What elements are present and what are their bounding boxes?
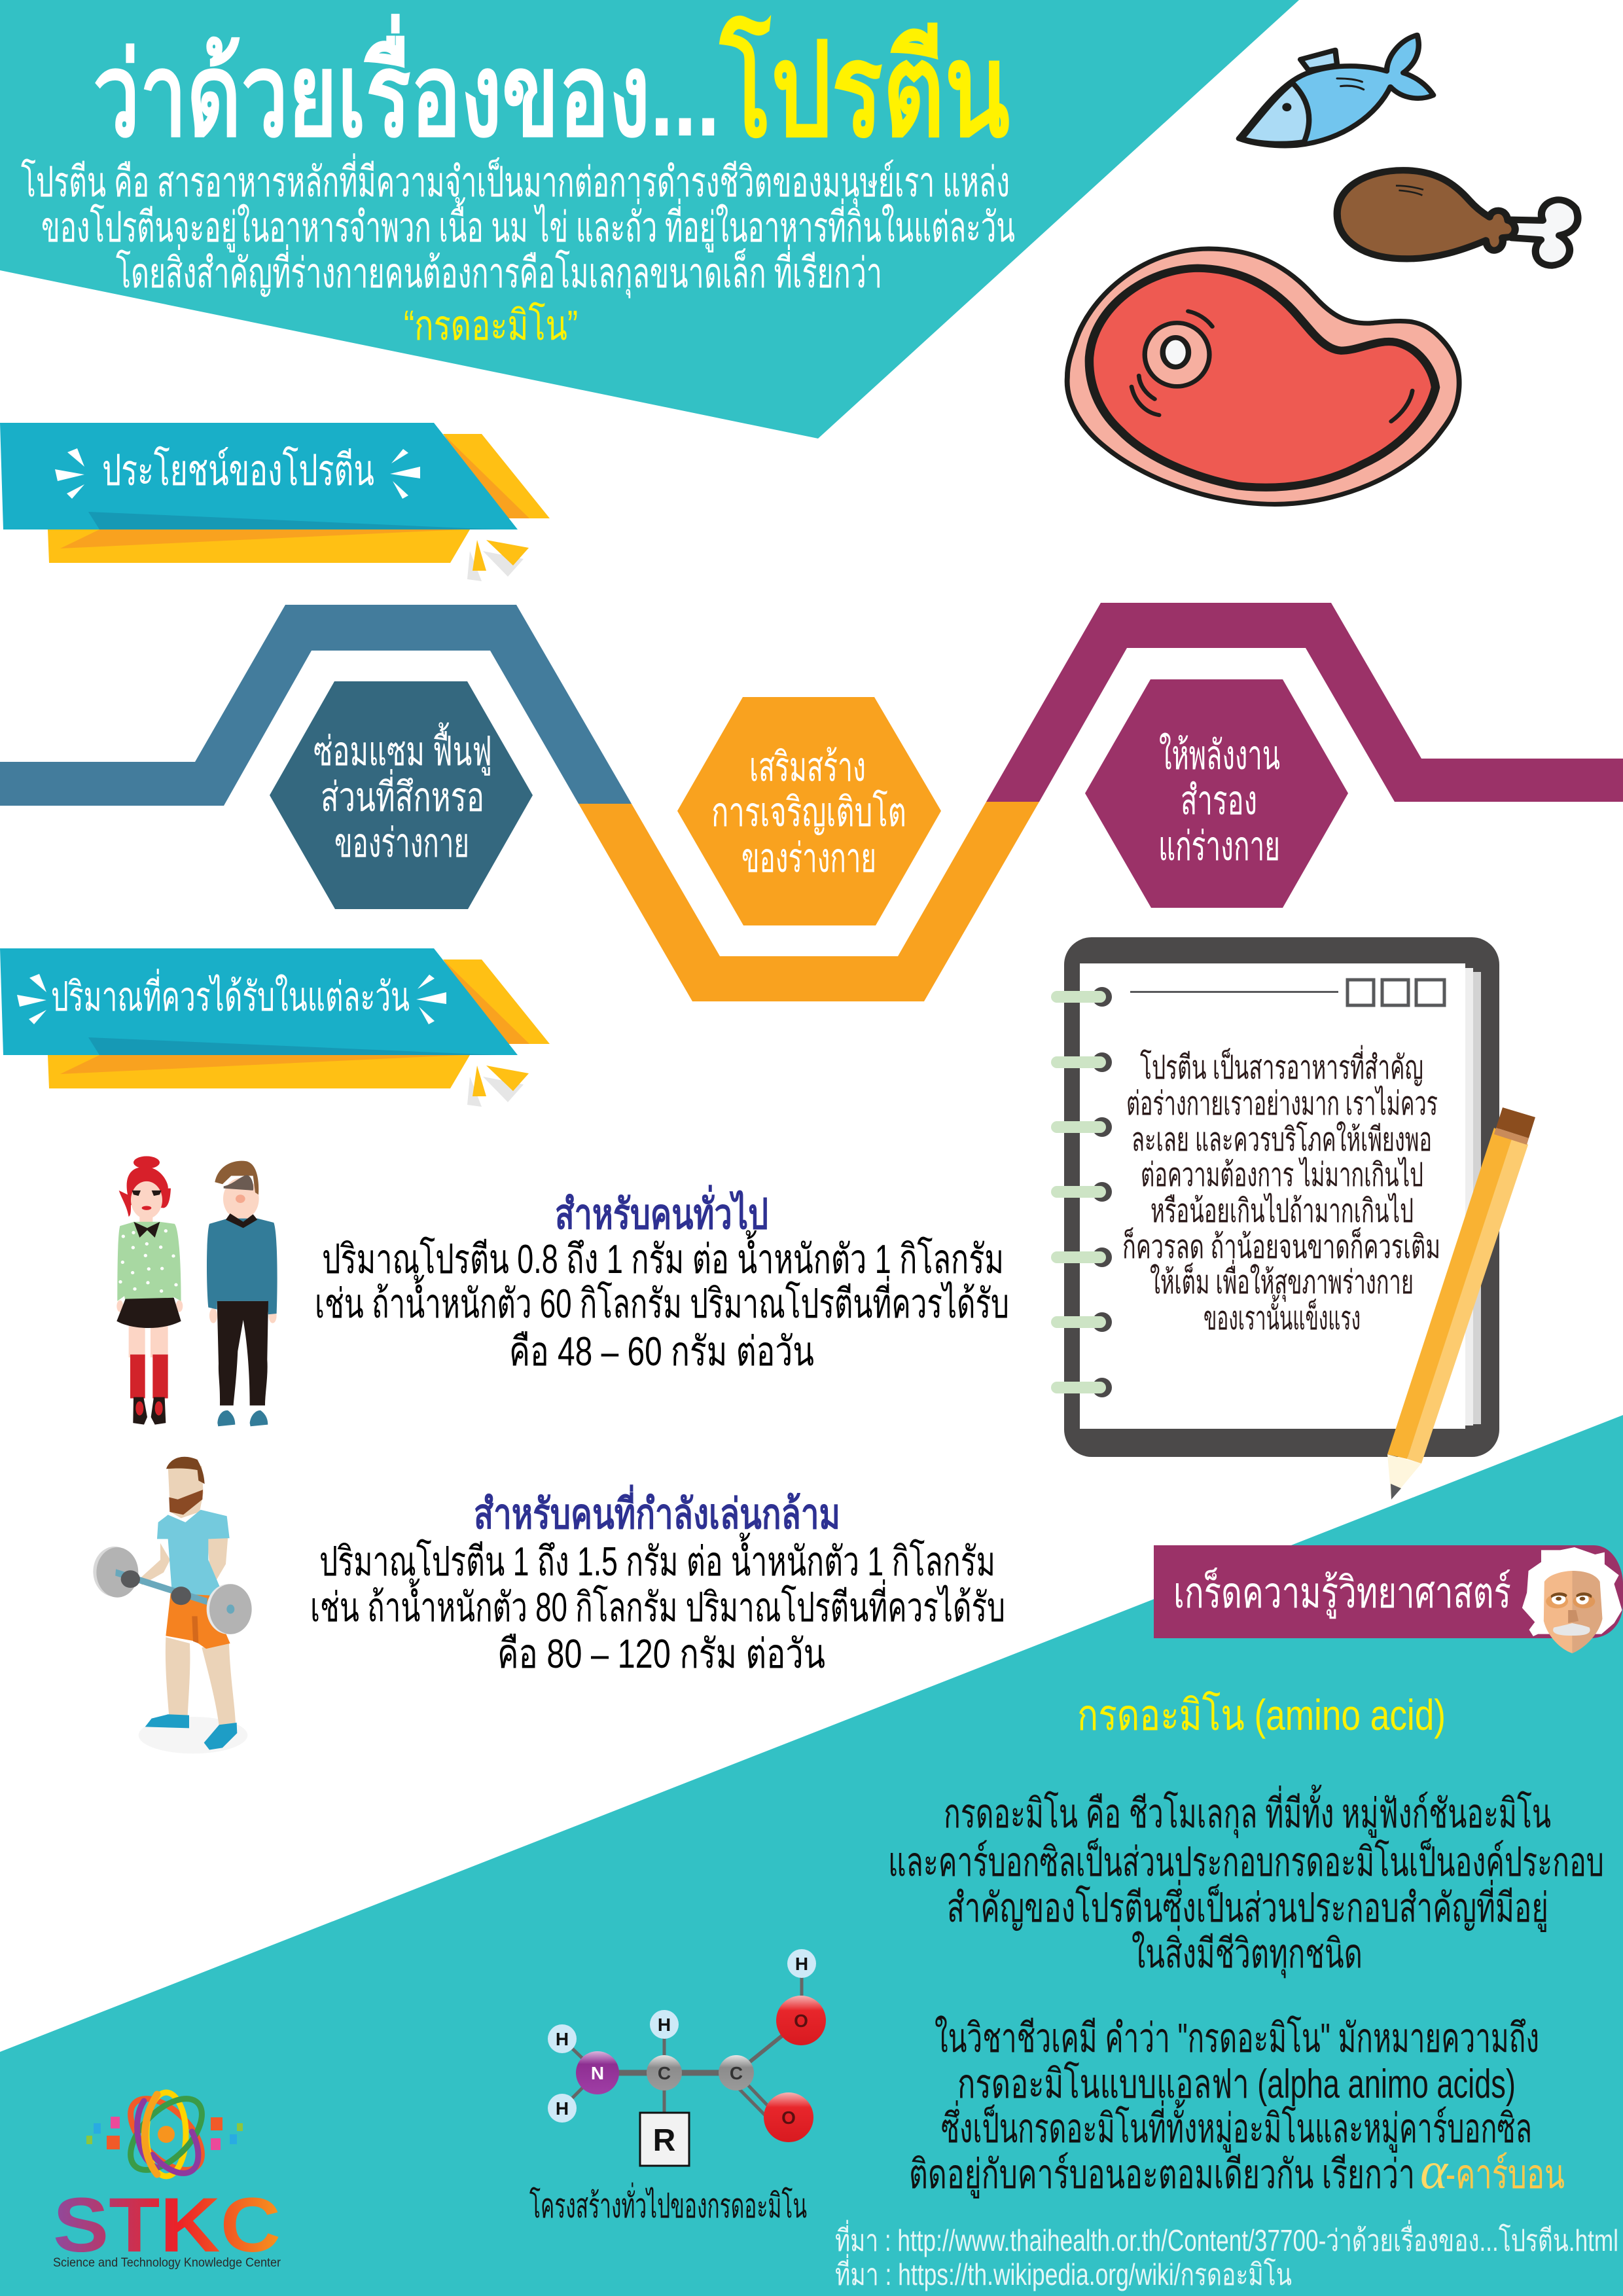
icon: chicken drumstick <box>1337 170 1578 266</box>
hexagon: growth: การเจริญเติบโต <box>711 789 906 835</box>
text: amino acid definition: ในสิ่งมีชีวิตทุกชนิด <box>1132 1926 1363 1978</box>
top teal background panel <box>0 0 1299 439</box>
woman <box>116 1157 183 1425</box>
hexagon: growth: เสริมสร้าง <box>749 745 866 790</box>
icon: scientist portrait <box>1522 1547 1622 1653</box>
logo: STKC atom symbol <box>86 2085 243 2184</box>
icon: fish <box>1239 35 1433 146</box>
notebook text: หรือน้อยเกินไปถ้ามากเกินไป <box>1150 1193 1414 1229</box>
intro paragraph: โดยสิ่งสำคัญที่ร่างกายคนต้องการคือโมเลกุลขนาดเล็ก ที่เรียกว่า <box>116 244 882 298</box>
text: amino acid definition <box>888 1784 1604 1978</box>
text: sources: ที่มา : https://th.wikipedia.org/wiki/กรดอะมิโน <box>835 2253 1292 2291</box>
text: biochemistry note: α <box>1420 2142 1449 2200</box>
text: bodybuilders <box>310 1484 1005 1677</box>
hexagon: energy: สำรอง <box>1181 778 1257 823</box>
hexagon: repair: ซ่อมแซม ฟื้นฟู <box>313 722 492 776</box>
text: bodybuilders: ปริมาณโปรตีน 1 ถึง 1.5 กรัม ต่อ น้ำหนักตัว 1 กิโลกรัม <box>319 1532 995 1585</box>
hexagon: energy: แก่ร่างกาย <box>1158 824 1280 869</box>
banner: benefits of protein <box>0 423 550 581</box>
intro paragraph: โปรตีน คือ สารอาหารหลักที่มีความจำเป็นมากต่อการดำรงชีวิตของมนุษย์เรา แหล่ง <box>21 153 1010 207</box>
zigzag band: blue <box>0 605 632 806</box>
text: bodybuilders: เช่น ถ้าน้ำหนักตัว 80 กิโลกรัม ปริมาณโปรตีนที่ควรได้รับ <box>310 1578 1005 1630</box>
notebook <box>1051 937 1499 1457</box>
text: biochemistry note: ติดอยู่กับคาร์บอนอะตอมเดียวกัน เรียกว่า <box>909 2152 1415 2198</box>
notebook spiral rings <box>1051 987 1112 1397</box>
text: bodybuilders: คือ 80 – 120 กรัม ต่อวัน <box>497 1632 825 1677</box>
heading: amino acid: กรดอะมิโน (amino acid) <box>1077 1691 1446 1739</box>
icon: pencil <box>1387 1107 1535 1499</box>
caption: molecule: โครงสร้างทั่วไปของกรดอะมิโน <box>529 2182 807 2225</box>
text: sources <box>835 2219 1618 2291</box>
notebook text: ละเลย และควรบริโภคให้เพียงพอ <box>1132 1121 1432 1158</box>
banner: recommended daily amount <box>0 948 550 1107</box>
notebook text: ต่อร่างกายเราอย่างมาก เราไม่ควร <box>1126 1085 1438 1122</box>
notebook text: ของเรานั้นแข็งแรง <box>1204 1295 1361 1336</box>
text: general people: ปริมาณโปรตีน 0.8 ถึง 1 กรัม ต่อ น้ำหนักตัว 1 กิโลกรัม <box>322 1230 1004 1282</box>
hexagon: repair <box>270 681 533 909</box>
text: general people: คือ 48 – 60 กรัม ต่อวัน <box>509 1329 814 1374</box>
zigzag band: orange <box>579 802 1039 1001</box>
hexagon: repair: ส่วนที่สึกหรอ <box>321 769 484 820</box>
hexagon: growth <box>677 697 941 925</box>
notebook text <box>1122 1045 1440 1336</box>
diagram: amino acid molecule: H <box>658 2015 671 2035</box>
text: general people: เช่น ถ้าน้ำหนักตัว 60 กิโลกรัม ปริมาณโปรตีนที่ควรได้รับ <box>315 1274 1009 1327</box>
man <box>207 1161 277 1426</box>
diagram: amino acid molecule <box>548 1949 826 2166</box>
diagram: amino acid molecule: N <box>591 2063 604 2083</box>
banner: recommended daily amount: ปริมาณที่ควรได้รับในแต่ละวัน <box>51 969 410 1020</box>
notebook text: ต่อความต้องการ ไม่มากเกินไป <box>1141 1157 1423 1193</box>
text: biochemistry note <box>909 2015 1565 2200</box>
notebook text: ให้เต็ม เพื่อให้สุขภาพร่างกาย <box>1150 1260 1414 1302</box>
diagram: amino acid molecule: C <box>730 2063 743 2083</box>
illustration: man and woman <box>116 1157 277 1426</box>
intro paragraph <box>21 153 1015 349</box>
diagram: amino acid molecule: H <box>556 2098 569 2119</box>
bottom teal background panel <box>0 1415 1623 2296</box>
text: general people: สำหรับคนทั่วไป <box>555 1185 768 1238</box>
title: โปรตีน <box>719 14 1010 164</box>
banner: science knowledge: เกร็ดความรู้วิทยาศาสตร์ <box>1173 1567 1511 1619</box>
diagram: amino acid molecule: H <box>556 2029 569 2049</box>
title: ว่าด้วยเรื่องของ... <box>93 14 720 160</box>
hexagon: energy <box>1085 679 1348 908</box>
banner: science knowledge <box>1154 1545 1623 1638</box>
diagram: amino acid molecule: O <box>781 2108 796 2128</box>
diagram: amino acid molecule: R <box>653 2123 675 2158</box>
hexagon: repair: ของร่างกาย <box>334 821 469 866</box>
intro paragraph: “กรดอะมิโน” <box>404 302 578 349</box>
banner: benefits of protein: ประโยชน์ของโปรตีน <box>102 446 374 494</box>
logo: STKC wordmark: STKC <box>53 2182 281 2269</box>
text: bodybuilders: สำหรับคนที่กำลังเล่นกล้าม <box>474 1484 840 1537</box>
text: biochemistry note: -คาร์บอน <box>1446 2152 1565 2197</box>
zigzag band: purple <box>986 603 1623 802</box>
icon: steak <box>1067 249 1459 504</box>
notebook text: ก็ควรลด ถ้าน้อยจนขาดก็ควรเติม <box>1122 1227 1440 1265</box>
intro paragraph: ของโปรตีนจะอยู่ในอาหารจำพวก เนื้อ นม ไข่ และถั่ว ที่อยู่ในอาหารที่กินในแต่ละวัน <box>41 197 1015 253</box>
diagram: amino acid molecule: H <box>795 1954 808 1974</box>
diagram: amino acid molecule: C <box>658 2063 671 2083</box>
notebook text: โปรตีน เป็นสารอาหารที่สำคัญ <box>1140 1045 1423 1086</box>
hexagon: growth: ของร่างกาย <box>741 836 876 881</box>
illustration: weightlifter <box>93 1457 252 1753</box>
text: general people <box>315 1185 1009 1374</box>
diagram: amino acid molecule: O <box>794 2011 808 2031</box>
hexagon: energy: ให้พลังงาน <box>1159 732 1280 778</box>
logo: STKC wordmark: Science and Technology Knowledge Center <box>53 2256 281 2270</box>
